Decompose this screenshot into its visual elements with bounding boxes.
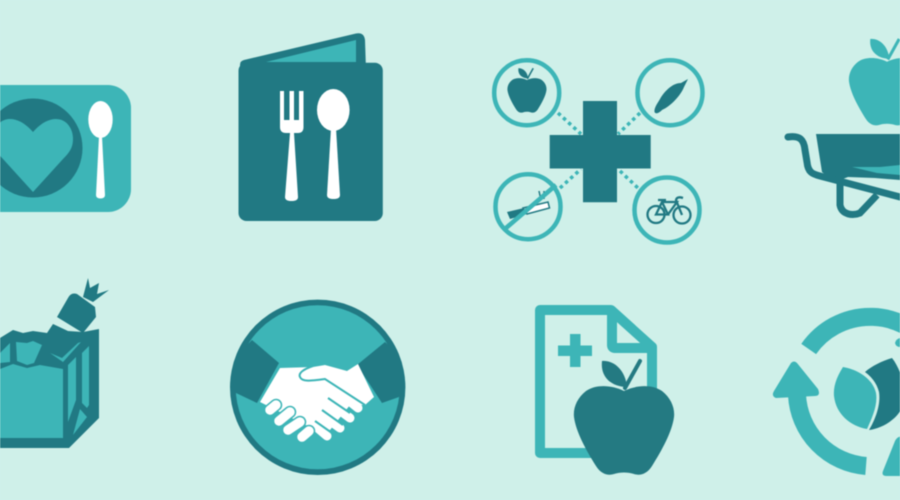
bag front	[0, 364, 63, 438]
icon: medical document with apple	[540, 310, 674, 475]
circle: no smoking	[496, 174, 560, 239]
icon: grocery bag with carrot	[0, 278, 109, 448]
wheel frame	[840, 183, 877, 214]
hands	[260, 364, 374, 430]
carrot	[57, 294, 96, 333]
circle: bicycle	[634, 178, 700, 242]
connector dots	[558, 113, 640, 189]
circle: apple	[494, 60, 559, 125]
medical cross	[550, 101, 651, 202]
tray	[816, 134, 900, 182]
icon: plate with heart and spoon	[0, 85, 131, 212]
icon: recycling arrows with leaves	[773, 317, 900, 476]
icon: wheelbarrow with apple	[788, 39, 900, 214]
circle: pepper	[638, 60, 702, 125]
icon: menu with fork and spoon	[238, 33, 383, 221]
handle and beam	[788, 137, 900, 197]
icon: health cross with lifestyle circles	[494, 60, 702, 242]
icon: handshake badge	[222, 300, 415, 475]
